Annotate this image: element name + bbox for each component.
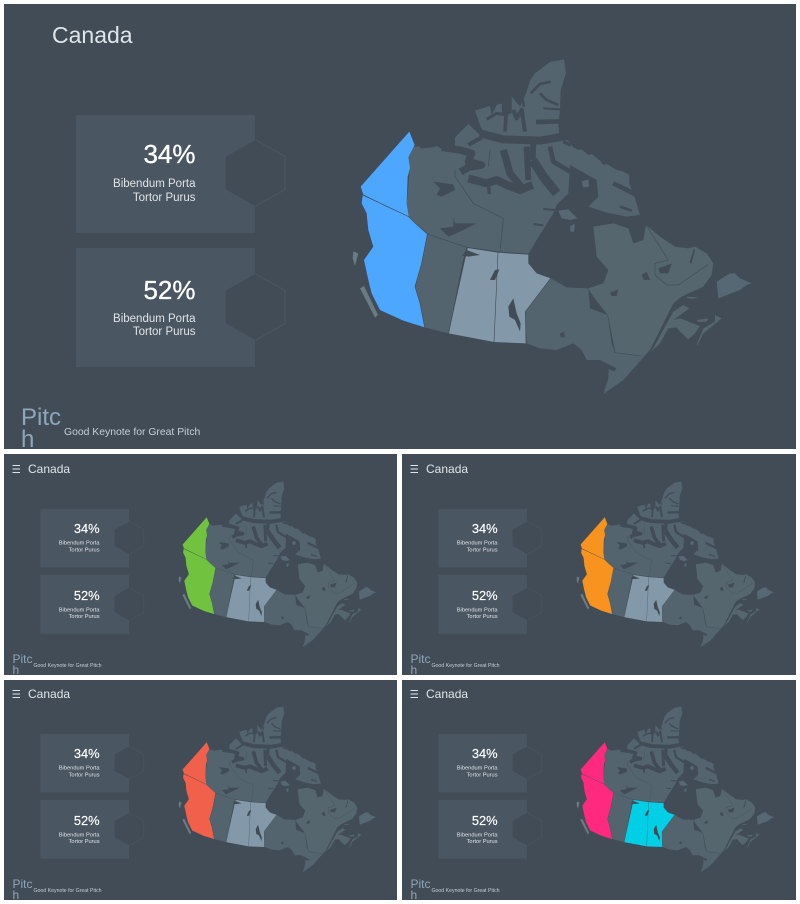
stat cards: 52% [143,275,196,305]
map of Canada [179,481,376,647]
title: Canada [52,22,133,48]
stat cards: Bibendum Porta [113,178,196,190]
title: Canada [28,687,70,701]
panel: small slide, red [4,680,397,902]
title: Canada [426,462,468,476]
logo and tagline [13,654,102,674]
logo wordmark: Pitc [21,404,61,431]
logo and tagline [411,654,500,674]
menu icon [12,466,20,472]
menu icon [410,466,418,472]
logo and tagline: h [410,663,417,677]
panel: small slide, orange [402,454,796,677]
stat cards: Bibendum Porta [113,313,196,325]
tagline: Good Keynote for Great Pitch [64,427,201,438]
logo and tagline: h [410,888,417,902]
stat cards [438,509,542,634]
logo and tagline: h [12,663,19,677]
logo and tagline: Pitc [410,652,431,666]
map of Canada [353,59,752,394]
stat cards: Tortor Purus [133,192,196,204]
map of Canada [179,706,376,872]
stat cards [438,734,542,859]
logo and tagline [13,880,102,899]
logo and tagline: Pitc [410,877,431,891]
logo and tagline: Good Keynote for Great Pitch [34,663,102,669]
logo and tagline [411,880,500,899]
stat cards [40,509,144,634]
panel: main slide, blue [4,4,796,453]
logo and tagline: Good Keynote for Great Pitch [432,663,500,669]
stat cards: 34% [143,139,196,169]
stat cards: Tortor Purus [133,326,196,338]
menu icon [410,690,418,698]
stat cards [76,115,285,367]
map of Canada [577,706,774,872]
panel: small slide, green [4,454,397,677]
logo and tagline: Good Keynote for Great Pitch [432,888,500,894]
menu icon [12,690,20,698]
title: Canada [28,462,70,476]
map of Canada [577,481,774,647]
title: Canada [426,687,468,701]
stat cards [40,734,144,859]
logo wordmark: h [21,426,34,453]
panel: small slide, pink and cyan [402,680,796,902]
logo wordmark [22,408,60,447]
logo and tagline: Pitc [12,652,33,666]
logo and tagline: Good Keynote for Great Pitch [34,888,102,894]
logo and tagline: Pitc [12,877,33,891]
logo and tagline: h [12,888,19,902]
